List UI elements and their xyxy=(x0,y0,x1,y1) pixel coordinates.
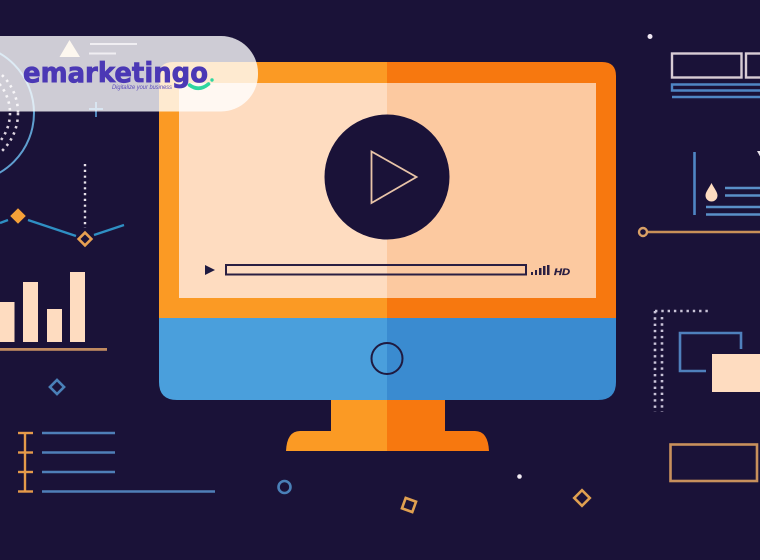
logo smile xyxy=(190,78,214,88)
screen xyxy=(179,83,596,298)
top right decorations xyxy=(648,34,760,97)
monitor stand xyxy=(286,398,489,451)
line chart xyxy=(0,164,124,245)
icon: banner triangle xyxy=(60,40,80,57)
overlapping rectangles xyxy=(680,333,760,392)
logo wordmark: emarketingo xyxy=(23,56,208,89)
icon: radar circle xyxy=(0,44,34,182)
plus icon xyxy=(89,102,103,117)
power button xyxy=(372,343,402,374)
bottom decorations xyxy=(278,474,590,512)
icon: blue diamond xyxy=(50,380,64,394)
bar chart xyxy=(0,272,107,351)
monitor xyxy=(159,62,616,451)
dotted corner xyxy=(655,311,711,412)
monitor frame xyxy=(159,62,616,318)
list with orange bracket xyxy=(18,433,215,492)
video controls xyxy=(205,265,571,277)
text block with drop icon xyxy=(694,151,760,215)
logo banner xyxy=(0,36,258,112)
video controls: HD xyxy=(554,267,571,277)
banner lines xyxy=(89,44,137,54)
orange outline rectangle xyxy=(670,444,757,481)
play button xyxy=(324,114,450,240)
logo tagline: Digitalize your business xyxy=(112,85,172,91)
orange timeline xyxy=(639,228,760,236)
monitor base panel xyxy=(159,318,616,400)
